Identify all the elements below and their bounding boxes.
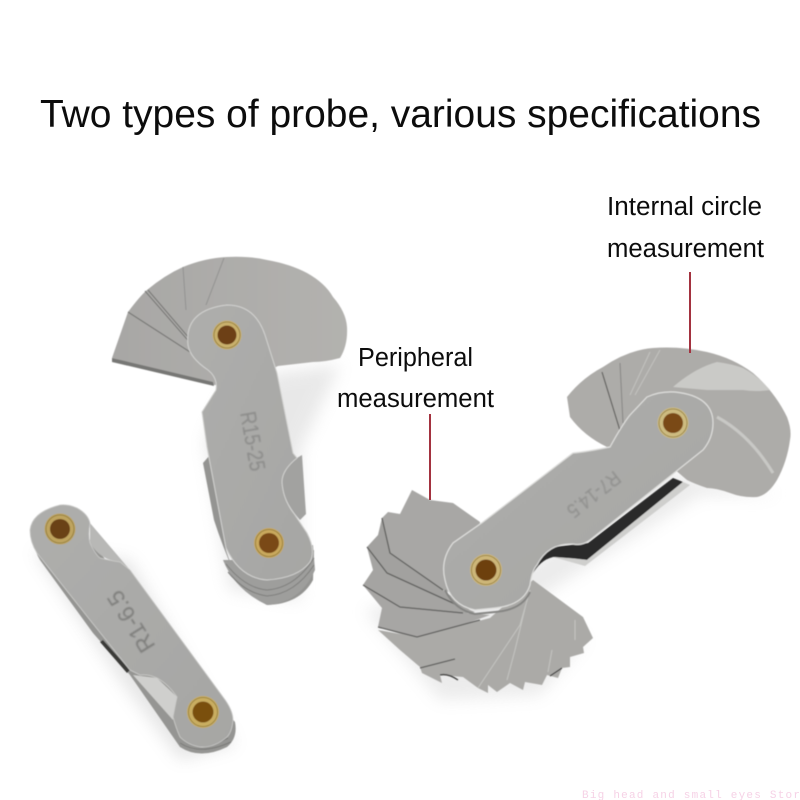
- engraved size: R1-6.5: [102, 585, 161, 657]
- small blade at notch: [282, 455, 306, 520]
- title: Two types of probe, various specifications: [40, 93, 761, 136]
- closed blades: [90, 523, 130, 570]
- blade fan: [112, 257, 347, 385]
- fan: toothed peripheral blades: [382, 490, 480, 600]
- rivet: bottom: [254, 528, 284, 558]
- fan: rounded internal-circle blades: [567, 348, 791, 497]
- rivet: top: [212, 320, 242, 350]
- label: internal circle measurement: measurement: [607, 235, 764, 263]
- rivet: top: [658, 408, 688, 438]
- handle: [188, 305, 312, 580]
- handle: [444, 392, 713, 610]
- stacked leaves below the handle: [203, 455, 314, 605]
- engraved size: R15-25: [235, 410, 270, 473]
- pointer: peripheral: [429, 414, 431, 500]
- rivet: bottom: [470, 554, 502, 586]
- engraved size: R7-14.5: [562, 466, 624, 522]
- label: peripheral measurement: Peripheral: [358, 344, 473, 372]
- rivet: top: [44, 514, 76, 544]
- label: internal circle measurement: [607, 193, 764, 263]
- probe: middle gauge with internal-circle blades: [112, 257, 347, 605]
- label: peripheral measurement: measurement: [337, 385, 494, 413]
- label: peripheral measurement: [337, 344, 494, 413]
- probe: lower-left closed gauge: [30, 505, 236, 760]
- pointer: internal circle: [689, 272, 691, 353]
- stacked leaves: [33, 540, 236, 754]
- handle: [30, 505, 233, 747]
- label: internal circle measurement: Internal circle: [607, 193, 762, 221]
- rivet: bottom: [187, 696, 219, 728]
- dark gap between the leaves: [532, 478, 683, 575]
- probe: right open gauge: [363, 348, 791, 700]
